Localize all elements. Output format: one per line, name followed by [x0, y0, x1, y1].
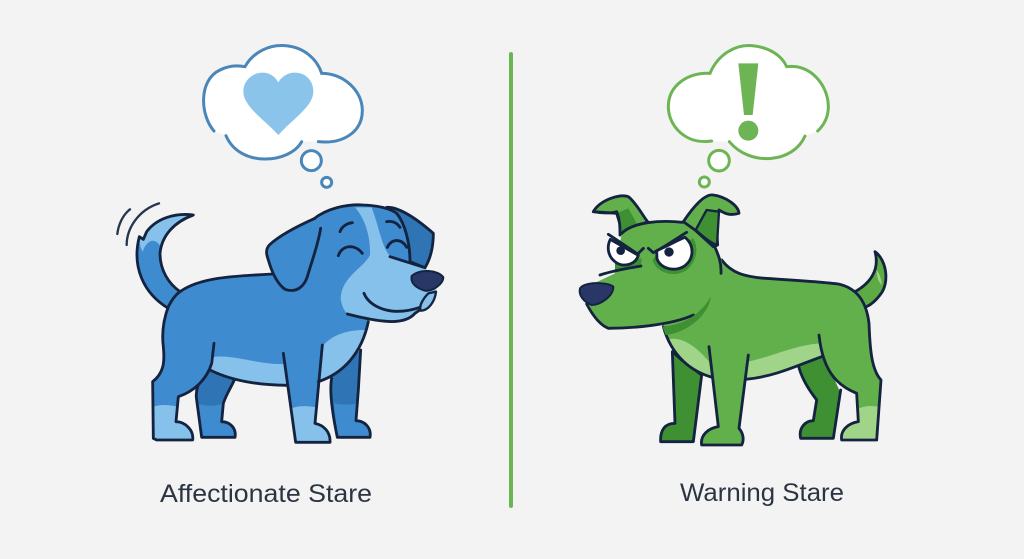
skull and muzzle — [580, 221, 724, 328]
left eye — [608, 239, 638, 265]
blue dog: affectionate — [117, 203, 443, 442]
green dog: warning — [580, 195, 886, 445]
far ear — [593, 196, 648, 235]
body with hind and front leg — [153, 274, 368, 442]
angry brows and muzzle line — [600, 232, 687, 275]
skull — [287, 205, 435, 321]
thought bubble: exclamation — [668, 46, 828, 187]
far hind leg — [196, 370, 235, 437]
head — [580, 195, 739, 335]
light paws — [153, 405, 193, 440]
belly markings — [668, 339, 712, 377]
wag motion lines — [117, 203, 159, 245]
far hind leg — [798, 357, 841, 438]
head — [267, 205, 443, 322]
eye shadow — [652, 238, 696, 274]
vertical divider — [509, 52, 513, 508]
far front leg — [331, 350, 370, 437]
label: Warning Stare: Warning Stare — [680, 479, 844, 507]
icon: heart — [243, 73, 313, 135]
body with hind and front leg — [663, 260, 881, 445]
nose — [580, 283, 613, 305]
tail — [137, 214, 193, 308]
belly markings — [209, 356, 288, 386]
tongue fold — [420, 292, 436, 311]
eyebrow and closed eyes — [338, 221, 420, 311]
tail — [855, 252, 886, 307]
thought bubble: heart — [204, 46, 362, 187]
jaw shadow — [662, 297, 711, 335]
far front leg — [661, 352, 702, 442]
face blaze — [341, 207, 440, 322]
icon: exclamation mark — [738, 63, 758, 115]
far ear — [387, 207, 433, 268]
nose — [411, 271, 443, 291]
near ear — [683, 195, 739, 247]
light paw — [841, 406, 878, 438]
ear — [267, 218, 321, 290]
right eye — [657, 237, 692, 269]
label: Affectionate Stare: Affectionate Stare — [160, 480, 372, 508]
